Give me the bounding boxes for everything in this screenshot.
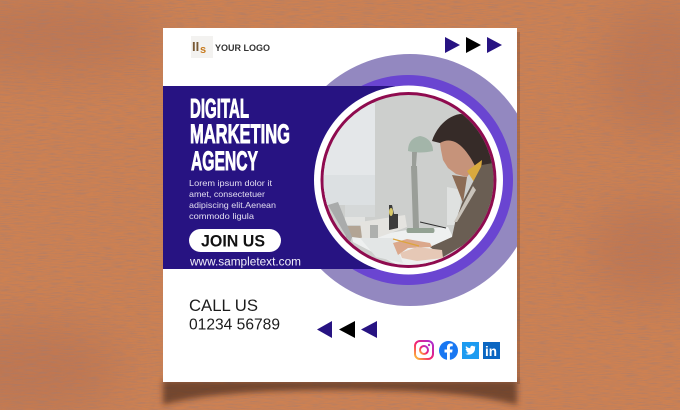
join us button: [189, 229, 281, 252]
logo: [191, 36, 270, 58]
bottom arrows: [317, 321, 377, 338]
poster card: [163, 28, 536, 382]
call us: 01234 56789: [189, 316, 280, 334]
title: DIGITAL: [190, 94, 249, 124]
title: MARKETING: [190, 119, 290, 149]
title: [190, 94, 290, 176]
top arrows: [445, 37, 502, 53]
body text: [189, 178, 276, 221]
logo: II: [192, 39, 199, 54]
body text: adipiscing elit.Aenean: [189, 200, 276, 210]
desk lamp: [406, 136, 446, 233]
photo frame rings: [314, 86, 503, 274]
concentric purple circles: [320, 54, 517, 306]
icon: twitter: [462, 342, 479, 359]
card shadow: [163, 32, 520, 405]
call us: [189, 296, 280, 334]
body text: amet, consectetuer: [189, 189, 265, 199]
call us: CALL US: [189, 296, 258, 315]
blue banner: [163, 86, 395, 269]
woman: [393, 114, 496, 261]
title: AGENCY: [191, 146, 258, 176]
icon: facebook: [439, 341, 458, 360]
website: www.sampletext.com: [189, 256, 301, 268]
body text: Lorem ipsum dolor it: [189, 178, 273, 188]
join us button: JOIN US: [201, 232, 265, 250]
icon: instagram: [415, 341, 433, 359]
photo: woman working at desk: [324, 95, 494, 265]
icon: linkedin: [483, 342, 500, 359]
logo: s: [200, 44, 206, 56]
body text: commodo ligula: [189, 211, 254, 221]
logo: YOUR LOGO: [215, 43, 270, 54]
icon: linkedin: in: [485, 344, 497, 359]
